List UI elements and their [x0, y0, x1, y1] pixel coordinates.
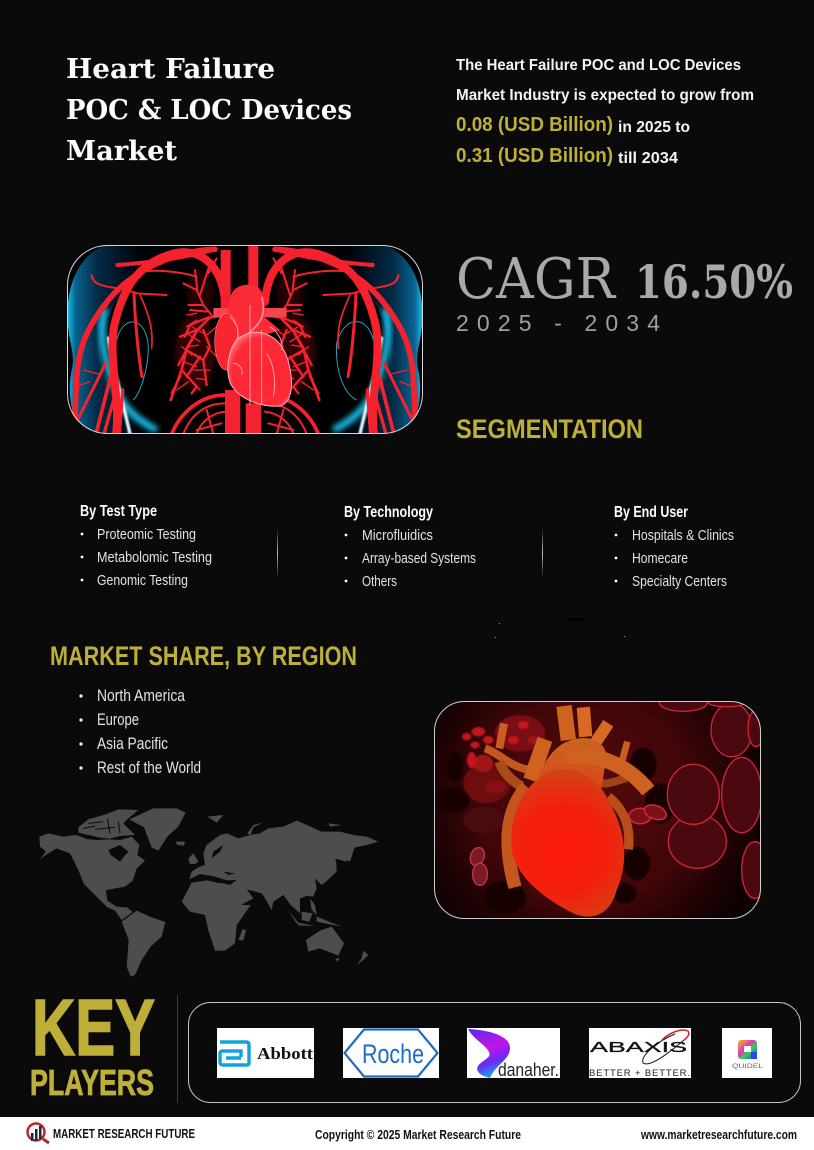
logo: roche: Roche — [362, 1039, 424, 1069]
madagascar — [238, 929, 246, 941]
segment: by end user: Specialty Centers — [632, 573, 727, 590]
south america — [122, 911, 165, 977]
CAGR period: 2025 - 2034 — [456, 310, 660, 336]
logo: danaher: danaher. — [498, 1060, 559, 1080]
CAGR figure — [456, 247, 793, 312]
heart — [215, 285, 292, 406]
market growth statement: The Heart Failure POC and LOC Devices — [456, 57, 741, 74]
segment: by test type: Genomic Testing — [97, 572, 188, 589]
segment: by technology: Microfluidics — [362, 527, 433, 544]
market growth statement: Market Industry is expected to grow from — [456, 87, 754, 104]
image: 3d heart with blood cells — [433, 694, 768, 920]
footer: MARKET RESEARCH FUTURE — [53, 1126, 195, 1141]
africa — [182, 880, 251, 951]
greenland — [129, 808, 186, 851]
logo: abaxis: BETTER + BETTER. — [589, 1068, 690, 1079]
segment: by test type: Metabolomic Testing — [97, 549, 212, 566]
dark cells — [437, 748, 675, 914]
great vessels — [226, 245, 253, 317]
market share heading: MARKET SHARE, BY REGION — [50, 641, 357, 671]
market growth statement: in 2025 to — [618, 119, 690, 136]
segment: by technology: By Technology — [344, 504, 433, 521]
world map — [39, 808, 378, 977]
footer logo — [28, 1124, 49, 1143]
uk — [188, 853, 198, 864]
key players logo panel — [188, 1002, 800, 1102]
segment: by test type — [80, 503, 212, 589]
iceland — [175, 842, 185, 846]
title: POC & LOC Devices — [66, 95, 352, 126]
title: Market — [66, 136, 178, 167]
logo: quidel: QUIDEL — [732, 1064, 764, 1070]
blue body glow — [67, 243, 423, 434]
north-east islands — [328, 823, 342, 827]
japan — [323, 858, 337, 885]
region list: Europe — [97, 710, 139, 729]
segment: by technology: Others — [362, 573, 397, 590]
logo: abaxis — [589, 1028, 691, 1079]
australia — [306, 927, 344, 956]
key players heading: PLAYERS — [30, 1062, 154, 1103]
logo: abbott: Abbott — [257, 1044, 313, 1063]
blood cell clump — [462, 715, 545, 833]
philippines — [310, 898, 317, 915]
title: Heart Failure — [66, 54, 275, 85]
segment: by end user: By End User — [614, 504, 688, 521]
market growth statement — [456, 57, 754, 167]
footer — [0, 1117, 814, 1150]
heart body — [511, 769, 624, 917]
key players heading — [30, 983, 155, 1103]
inland water — [106, 845, 235, 899]
indonesia — [288, 910, 342, 927]
red blood cells — [468, 694, 768, 898]
market growth statement: 0.08 (USD Billion) — [456, 114, 613, 136]
market growth statement: 0.31 (USD Billion) — [456, 145, 613, 167]
segment: by end user — [614, 504, 734, 590]
logo: quidel — [722, 1028, 772, 1078]
region list: North America — [97, 686, 185, 705]
new zealand — [357, 951, 368, 965]
region list: Asia Pacific — [97, 734, 168, 753]
segment: by end user: Hospitals & Clinics — [632, 527, 734, 544]
region list: Rest of the World — [97, 758, 201, 777]
svalbard — [207, 815, 223, 823]
segment: by test type: By Test Type — [80, 503, 157, 520]
pulmonary arch — [567, 756, 648, 791]
tasmania — [335, 958, 340, 962]
heart vessels — [485, 706, 629, 887]
novaya zemlya — [247, 822, 263, 835]
canadian archipelago — [78, 809, 138, 839]
region list — [79, 686, 201, 777]
segment: by test type: Proteomic Testing — [97, 526, 196, 543]
key players heading: KEY — [32, 983, 155, 1072]
sakhalin — [346, 849, 354, 862]
eurasia — [189, 821, 378, 913]
footer: Copyright © 2025 Market Research Future — [315, 1127, 521, 1142]
segment: by end user: Homecare — [632, 550, 688, 567]
image: circulatory system and heart — [67, 243, 423, 438]
logo: roche — [343, 1028, 439, 1078]
segment: by technology: Array-based Systems — [362, 550, 476, 567]
logo: abbott — [217, 1028, 314, 1078]
logo: abaxis: ABAXIS — [590, 1039, 687, 1056]
CAGR figure: CAGR — [456, 247, 617, 312]
market growth statement: till 2034 — [618, 150, 678, 167]
north america — [39, 833, 145, 920]
logo: danaher — [467, 1028, 560, 1080]
title — [66, 54, 352, 167]
heart shoulder — [538, 738, 606, 789]
segment: by technology — [344, 504, 476, 590]
segmentation heading: SEGMENTATION — [456, 414, 643, 444]
